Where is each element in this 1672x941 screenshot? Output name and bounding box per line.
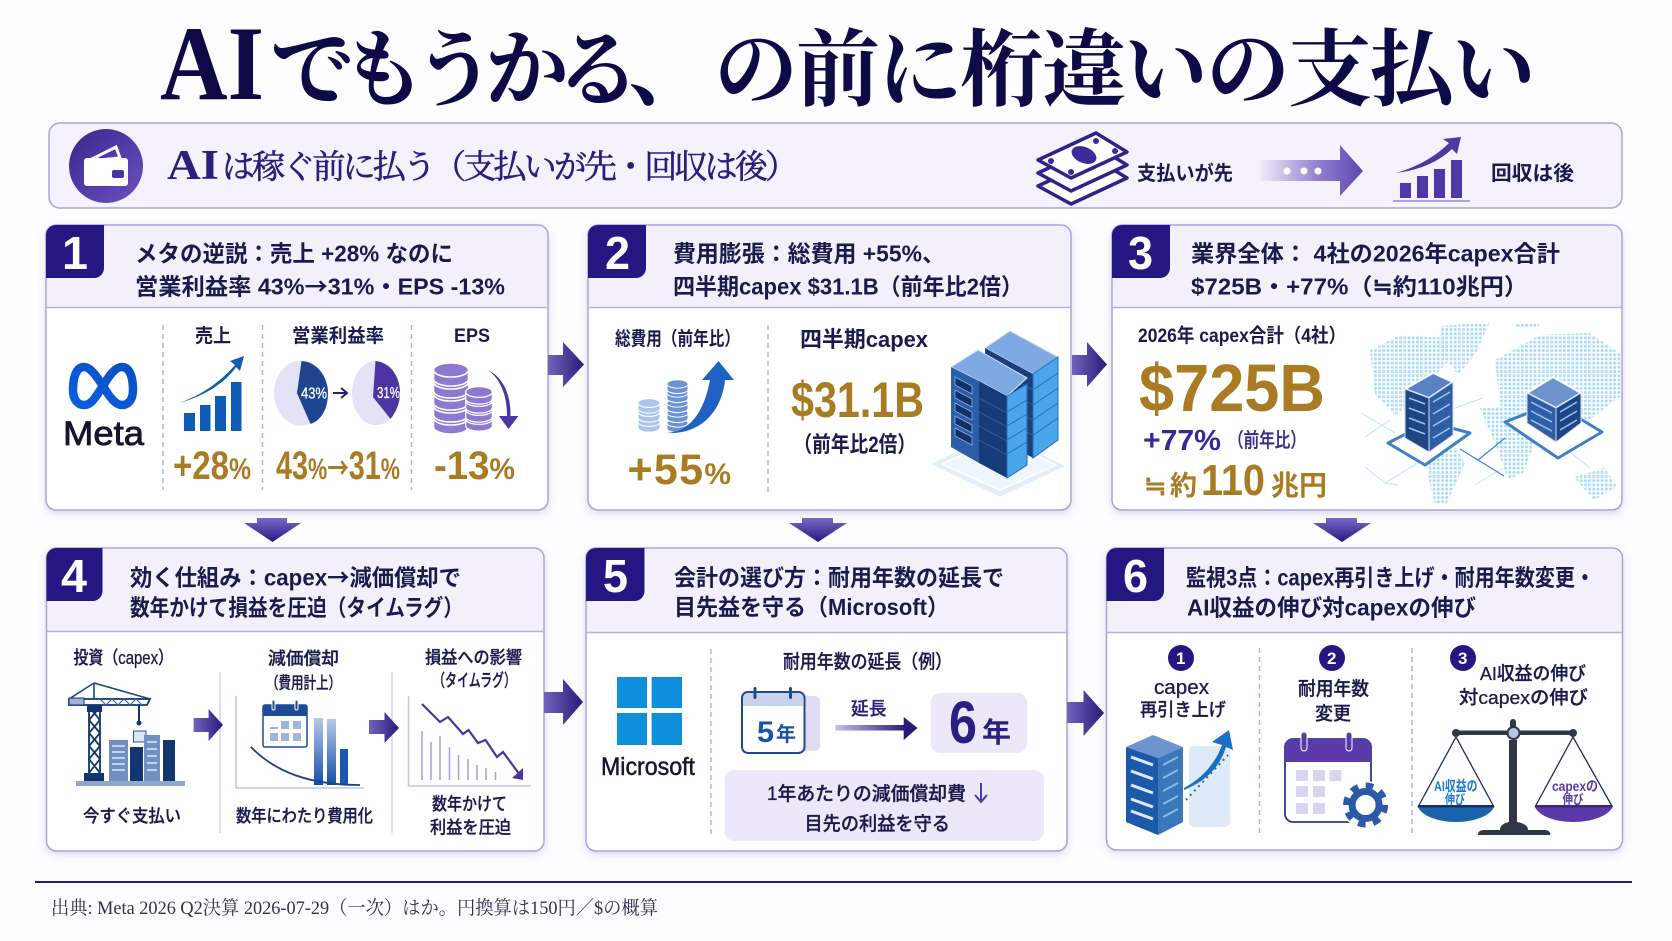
watch item 3: 3 <box>1458 649 1467 668</box>
arrow: 3 to 6 <box>1313 518 1371 542</box>
label: recover later: 回収は後 <box>1491 162 1574 185</box>
heading: 営業利益率 43%→31%・EPS -13% <box>135 268 505 302</box>
heading <box>1191 240 1560 300</box>
watch item 2: 変更 <box>1315 703 1351 724</box>
panel: card 6 <box>1106 548 1622 850</box>
banner headline: AI <box>167 143 219 189</box>
arrow: 2 to 3 <box>1072 342 1107 387</box>
step: depreciation <box>236 648 373 826</box>
step: depreciation: 数年にわたり費用化 <box>236 806 373 826</box>
logo: Meta: Meta <box>63 415 144 453</box>
step: capex: 今すぐ支払い <box>83 806 181 826</box>
metric: capex total: ≒約 <box>1144 471 1197 501</box>
heading: $725B・+77%（≒約110兆円） <box>1191 274 1528 300</box>
logo: Meta <box>63 367 144 453</box>
logo: Microsoft <box>601 677 695 781</box>
icon: calendar 5 years: 年 <box>776 723 796 746</box>
badge 3 <box>1112 225 1170 279</box>
metric: total cost: +55% <box>628 446 731 494</box>
arrow: 1 to 2 <box>548 342 584 387</box>
metric: total cost: 総費用（前年比） <box>615 327 740 350</box>
banner headline: は稼ぐ前に払う（支払いが先・回収は後） <box>222 149 798 186</box>
heading: 会計の選び方：耐用年数の延長で <box>674 564 1004 590</box>
badge 1 <box>46 225 104 279</box>
watch item 3: 対capexの伸び <box>1459 687 1589 708</box>
server left <box>1388 373 1470 465</box>
badge 1: 1 <box>62 227 88 279</box>
metric: total cost <box>615 327 740 494</box>
icon: server towers <box>931 331 1065 497</box>
footer rule and source: 出典: Meta 2026 Q2決算 2026-07-29（一次）はか。円換算は150円／$の概算 <box>51 897 658 919</box>
watch item 2: 耐用年数 <box>1298 678 1369 700</box>
arrow: depreciation to earnings <box>369 712 399 743</box>
metric: capex total <box>1138 324 1346 505</box>
pie: 31% <box>352 361 400 425</box>
watch item 3 <box>1418 645 1612 835</box>
heading: 効く仕組み：capex→減価償却で <box>130 558 461 592</box>
metric: quarterly capex: 四半期capex <box>800 327 929 352</box>
heading <box>130 558 463 620</box>
service life extension: 耐用年数の延長（例） <box>783 651 952 673</box>
metric: sales <box>173 325 251 488</box>
badge 5 <box>586 548 644 602</box>
metric: capex total: （前年比） <box>1228 429 1306 452</box>
chart: world map with data centers <box>1361 322 1622 503</box>
title: の前に桁違いの支払い <box>714 25 1536 118</box>
server right <box>1505 377 1602 458</box>
panel: card 5 <box>586 548 1067 851</box>
metric: capex total: +77% <box>1143 425 1221 457</box>
step: earnings impact: 利益を圧迫 <box>430 818 511 838</box>
metric: capex total: $725B <box>1139 351 1325 426</box>
arrow: capex to depreciation <box>194 709 223 741</box>
metric: sales: +28% <box>173 444 251 488</box>
step: earnings impact: 数年かけて <box>432 794 507 814</box>
arrow: 1 to 4 <box>244 518 301 542</box>
arrow: margin change <box>333 388 347 398</box>
metric: capex total: 110 <box>1201 456 1265 505</box>
badge 2 <box>588 225 646 279</box>
badge 4 <box>46 548 102 602</box>
badge 6: 6 <box>1123 550 1148 602</box>
panel: card 4 <box>46 548 544 851</box>
heading <box>673 240 1023 300</box>
icon: server rising <box>1126 730 1233 835</box>
heading: 費用膨張：総費用 +55%、 <box>673 240 945 266</box>
panel: card 1 <box>46 225 548 510</box>
badge 4: 4 <box>61 550 87 602</box>
icon: calendar 5 years <box>742 687 820 753</box>
panel: banner <box>49 123 1622 208</box>
6 years: 年 <box>982 717 1011 748</box>
watch item 3: AI収益の伸び <box>1480 663 1586 684</box>
pie: 43%: 43% <box>301 386 327 402</box>
metric: operating margin: 営業利益率 <box>292 325 384 347</box>
step: capex: 投資（capex） <box>74 648 173 668</box>
callout: depreciation per year <box>724 770 1044 841</box>
step: earnings impact: （タイムラグ） <box>433 670 516 690</box>
heading <box>674 564 1004 620</box>
callout: depreciation per year: 1年あたりの減価償却費 <box>767 783 966 805</box>
metric: quarterly capex: $31.1B <box>791 372 924 428</box>
heading <box>1186 564 1595 620</box>
badge 3: 3 <box>1128 227 1153 279</box>
metric: EPS <box>434 326 518 488</box>
heading: 四半期capex $31.1B（前年比2倍） <box>673 274 1023 300</box>
metric: operating margin: 43%→31% <box>276 444 400 488</box>
icon: balance scale: 伸び <box>1562 792 1584 807</box>
icon: growth chart <box>1393 137 1470 202</box>
badge 2: 2 <box>605 227 630 279</box>
panel: card 2 <box>588 225 1071 510</box>
step: earnings impact <box>408 648 531 838</box>
6 years: 6 <box>949 689 977 756</box>
icon: balance scale: 伸び <box>1445 792 1465 807</box>
badge 6 <box>1106 548 1164 602</box>
arrow: pay to recover <box>1260 145 1363 196</box>
heading <box>135 240 505 302</box>
title <box>160 5 1536 122</box>
metric: EPS: -13% <box>434 444 515 488</box>
watch item 1: 1 <box>1176 649 1185 668</box>
icon: balance scale <box>1418 719 1612 835</box>
icon: balance scale: capexの <box>1552 778 1598 794</box>
heading: メタの逆説：売上 +28% なのに <box>135 240 453 266</box>
metric: EPS: EPS <box>454 326 490 347</box>
icon: wallet <box>69 129 143 203</box>
service life extension <box>724 651 1044 841</box>
watch item 1: capex <box>1154 677 1209 699</box>
watch item 1 <box>1126 645 1233 835</box>
step: earnings impact: 損益への影響 <box>425 648 522 668</box>
title: AI <box>160 5 264 122</box>
arrow: 2 to 5 <box>789 518 847 542</box>
icon: calendar <box>263 700 307 747</box>
arrow: extension <box>836 717 918 740</box>
panel: card 3 <box>1112 225 1622 510</box>
heading: 監視3点：capex再引き上げ・耐用年数変更・ <box>1186 564 1595 590</box>
metric: quarterly capex: （前年比2倍） <box>794 432 916 457</box>
badge 5: 5 <box>603 550 628 602</box>
watch item 2 <box>1285 645 1390 829</box>
callout: depreciation per year: 目先の利益を守る <box>804 813 950 835</box>
arrow: 5 to 6 <box>1067 690 1104 736</box>
icon: balance scale: AI収益の <box>1434 778 1478 794</box>
title: でもうかる、 <box>270 25 712 118</box>
icon: crane and buildings <box>69 683 185 786</box>
pie: 43% <box>274 360 328 426</box>
label: pay first: 支払いが先 <box>1137 161 1233 185</box>
step: capex <box>69 648 185 826</box>
heading: AI収益の伸び対capexの伸び <box>1187 594 1476 620</box>
heading: 業界全体： 4社の2026年capex合計 <box>1191 240 1560 266</box>
step: depreciation: 減価償却 <box>268 648 339 668</box>
metric: sales: 売上 <box>195 325 231 347</box>
arrow: 4 to 5 <box>544 679 583 725</box>
metric: capex total: 兆円 <box>1271 470 1327 501</box>
pie: 31%: 31% <box>377 385 400 402</box>
heading: 数年かけて損益を圧迫（タイムラグ） <box>130 594 463 620</box>
watch item 1: 再引き上げ <box>1140 700 1226 720</box>
6 years <box>930 689 1027 756</box>
step: depreciation: （費用計上） <box>266 674 341 692</box>
icon: stacked money <box>1038 133 1127 204</box>
icon: calendar 5 years: 5 <box>757 716 774 749</box>
service life extension: 延長 <box>851 699 886 719</box>
logo: Microsoft: Microsoft <box>601 753 695 781</box>
icon: calendar and gear <box>1285 732 1390 829</box>
metric: operating margin <box>274 325 400 488</box>
watch item 2: 2 <box>1327 649 1336 668</box>
metric: capex total: 2026年 capex合計（4社） <box>1138 324 1346 347</box>
heading: 目先益を守る（Microsoft） <box>674 594 949 620</box>
metric: quarterly capex <box>791 327 929 457</box>
